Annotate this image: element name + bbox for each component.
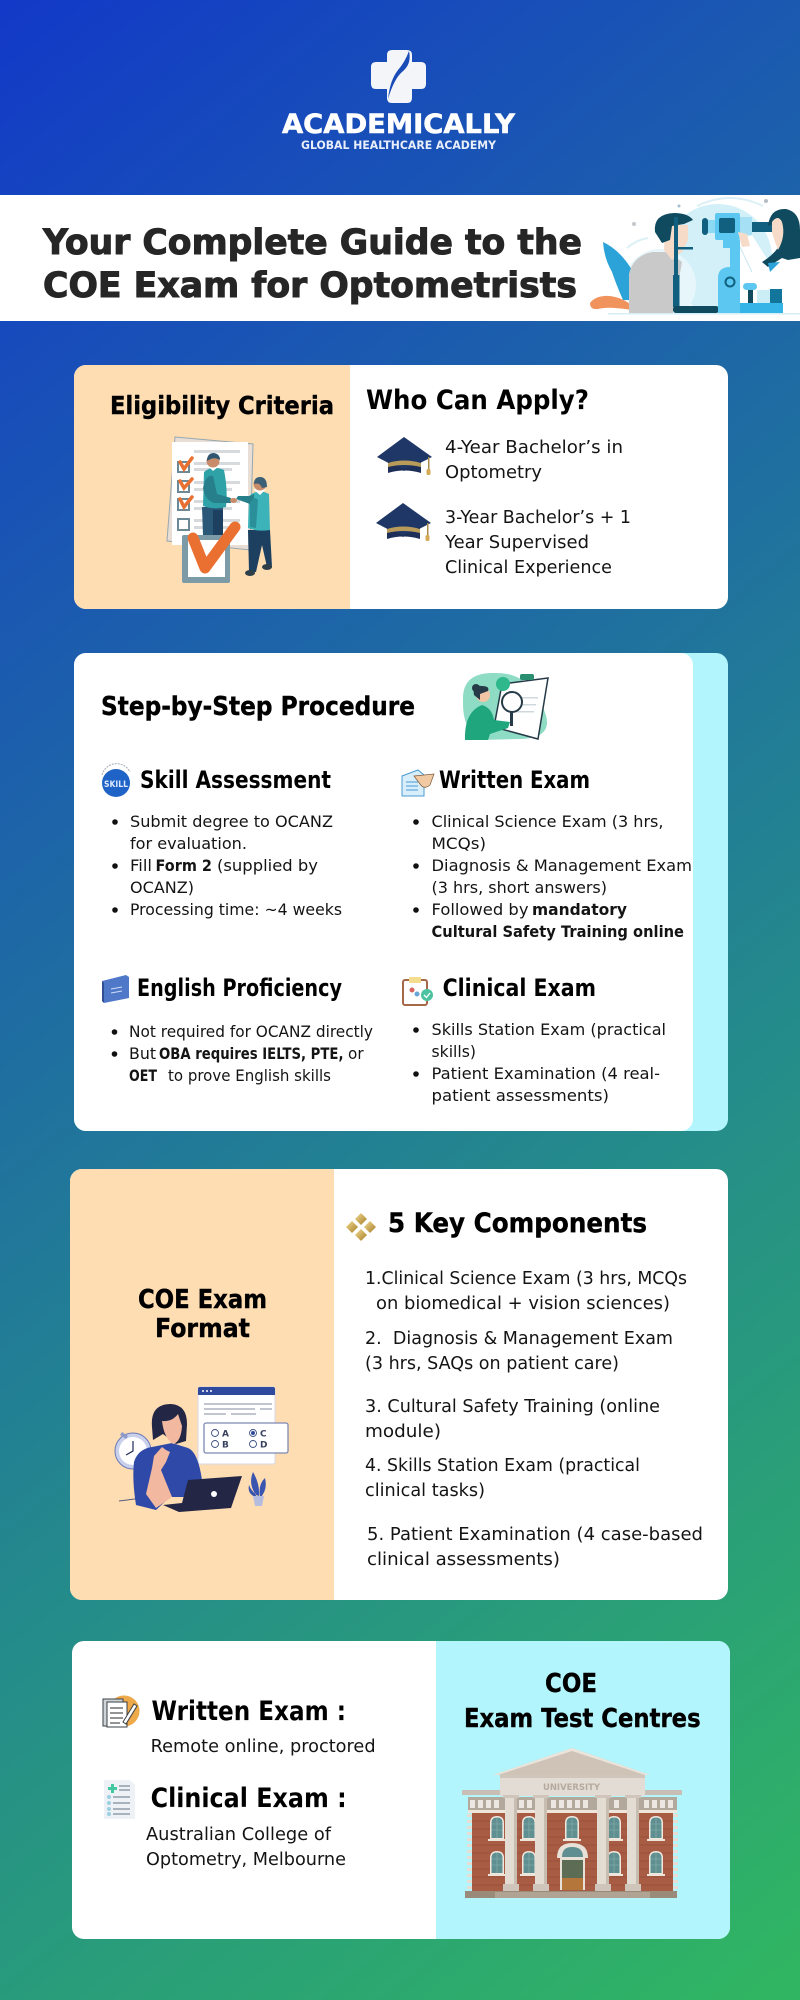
icon: skill badge: SKILL	[104, 780, 128, 790]
list: clinical exam: Patient Examination (4 real-	[432, 1064, 660, 1083]
heading: step-by-step procedure: Step-by-Step Procedure	[101, 692, 415, 722]
heading: exam test centres: COE	[545, 1669, 597, 1699]
icon: medical checklist	[104, 1780, 135, 1819]
text: four-year bachelor	[445, 437, 623, 483]
list: clinical exam: Skills Station Exam (practical	[432, 1020, 666, 1039]
list item 2: (3 hrs, SAQs on patient care)	[365, 1353, 619, 1374]
list item 1: 1.Clinical Science Exam (3 hrs, MCQs	[365, 1268, 687, 1289]
illustration: university building: UNIVERSITY	[543, 1783, 600, 1793]
panel: COE exam format	[70, 1169, 728, 1600]
list item 4: 4. Skills Station Exam (practical	[365, 1455, 640, 1476]
text: three-year bachelor	[444, 507, 631, 578]
list item 2: 2. Diagnosis & Management Exam	[365, 1328, 673, 1349]
list: written exam: Cultural Safety Training online	[432, 922, 684, 941]
icon: gold diamonds	[346, 1213, 376, 1241]
list: written exam: (3 hrs, short answers)	[432, 878, 607, 897]
illustration: online exam: B	[222, 1440, 229, 1450]
panel: test centres	[72, 1641, 730, 1939]
list: written exam	[413, 812, 692, 941]
text: three-year bachelor: 3-Year Bachelor’s + 1	[445, 507, 631, 528]
list item 2	[365, 1328, 673, 1374]
heading: exam test centres: Exam Test Centres	[464, 1704, 701, 1734]
icon: graduation cap	[377, 437, 432, 475]
icon: book	[102, 975, 129, 1003]
list item 1	[365, 1268, 687, 1314]
text: clinical location: Optometry, Melbourne	[146, 1849, 346, 1870]
list item 1: on biomedical + vision sciences)	[376, 1293, 670, 1314]
heading: clinical exam: Clinical Exam :	[151, 1783, 347, 1814]
text: clinical location	[146, 1824, 346, 1870]
title banner	[0, 195, 800, 321]
illustration: online exam: A	[222, 1430, 229, 1440]
list: skill assessment	[112, 812, 342, 919]
list: english proficiency: to prove English skills	[168, 1066, 331, 1085]
list item 5	[367, 1524, 703, 1570]
heading: written exam: Written Exam :	[152, 1696, 346, 1727]
heading: eligibility criteria: Eligibility Criteria	[110, 391, 334, 420]
list: written exam: Clinical Science Exam (3 hrs,	[432, 812, 664, 831]
list: written exam: mandatory	[532, 900, 628, 919]
heading: exam test centres	[464, 1669, 701, 1734]
logo	[282, 50, 515, 152]
list: skill assessment: OCANZ)	[130, 878, 194, 897]
list: written exam: Diagnosis & Management Exam	[432, 856, 692, 875]
icon: medical cross with hands	[371, 50, 426, 103]
list: skill assessment: Submit degree to OCANZ	[130, 812, 333, 831]
list: english proficiency: or	[348, 1044, 364, 1063]
icon: written document	[402, 770, 434, 796]
illustration: eye examination	[590, 198, 800, 321]
heading: skill assessment: Skill Assessment	[140, 766, 331, 794]
list: english proficiency: OBA requires IELTS, PTE,	[159, 1044, 344, 1063]
icon: writing papers	[103, 1696, 140, 1727]
heading: english proficiency: English Proficiency	[137, 974, 342, 1002]
panel: step-by-step procedure	[74, 653, 728, 1131]
illustration: online exam	[115, 1387, 288, 1512]
heading: written exam: Written Exam	[439, 766, 590, 794]
list: clinical exam	[413, 1020, 666, 1105]
list: clinical exam: patient assessments)	[432, 1086, 609, 1105]
list: skill assessment: for evaluation.	[130, 834, 247, 853]
list item 3: module)	[365, 1421, 441, 1442]
text: clinical location: Australian College of	[146, 1824, 332, 1845]
icon: skill badge	[102, 764, 130, 797]
brand tagline: GLOBAL HEALTHCARE ACADEMY	[301, 138, 497, 152]
title	[42, 223, 582, 306]
heading: COE exam format	[138, 1285, 267, 1344]
heading: clinical exam: Clinical Exam	[443, 974, 596, 1002]
heading: 5 key components: 5 Key Components	[388, 1208, 647, 1239]
heading: COE exam format: Format	[155, 1314, 250, 1344]
list: skill assessment: Form 2	[156, 856, 212, 875]
icon: graduation cap	[376, 503, 431, 541]
panel: eligibility criteria	[74, 365, 728, 609]
text: three-year bachelor: Year Supervised	[444, 532, 589, 553]
icon: clipboard	[403, 977, 433, 1005]
list: english proficiency: But	[129, 1044, 156, 1063]
illustration: online exam: D	[260, 1440, 267, 1450]
list: english proficiency: OET	[129, 1066, 157, 1085]
list: skill assessment: Fill	[130, 856, 152, 875]
list item 5: 5. Patient Examination (4 case-based	[367, 1524, 703, 1545]
list item 4: clinical tasks)	[365, 1480, 485, 1501]
list: skill assessment: Processing time: ~4 weeks	[130, 900, 342, 919]
illustration: reviewing document	[463, 673, 548, 740]
illustration: checklist handshake	[167, 437, 272, 583]
brand name: ACADEMICALLY	[282, 109, 515, 140]
heading: who can apply: Who Can Apply?	[366, 385, 589, 416]
illustration: online exam: C	[260, 1430, 267, 1440]
list: english proficiency	[112, 1022, 373, 1085]
list item 4	[365, 1455, 640, 1501]
list: written exam: Followed by	[432, 900, 528, 919]
list item 3	[365, 1396, 660, 1442]
list: clinical exam: skills)	[432, 1042, 476, 1061]
list: written exam: MCQs)	[432, 834, 486, 853]
title: COE Exam for Optometrists	[43, 266, 577, 306]
illustration: university building	[462, 1748, 682, 1898]
heading: COE exam format: COE Exam	[138, 1285, 267, 1315]
list: english proficiency: Not required for OCANZ directly	[129, 1022, 373, 1041]
text: four-year bachelor: 4-Year Bachelor’s in	[445, 437, 623, 458]
list: skill assessment: (supplied by	[217, 856, 318, 875]
title: Your Complete Guide to the	[42, 223, 582, 263]
list item 3: 3. Cultural Safety Training (online	[365, 1396, 660, 1417]
list item 5: clinical assessments)	[367, 1549, 560, 1570]
text: remote online: Remote online, proctored	[151, 1736, 376, 1757]
text: three-year bachelor: Clinical Experience	[445, 557, 612, 578]
text: four-year bachelor: Optometry	[445, 462, 542, 483]
